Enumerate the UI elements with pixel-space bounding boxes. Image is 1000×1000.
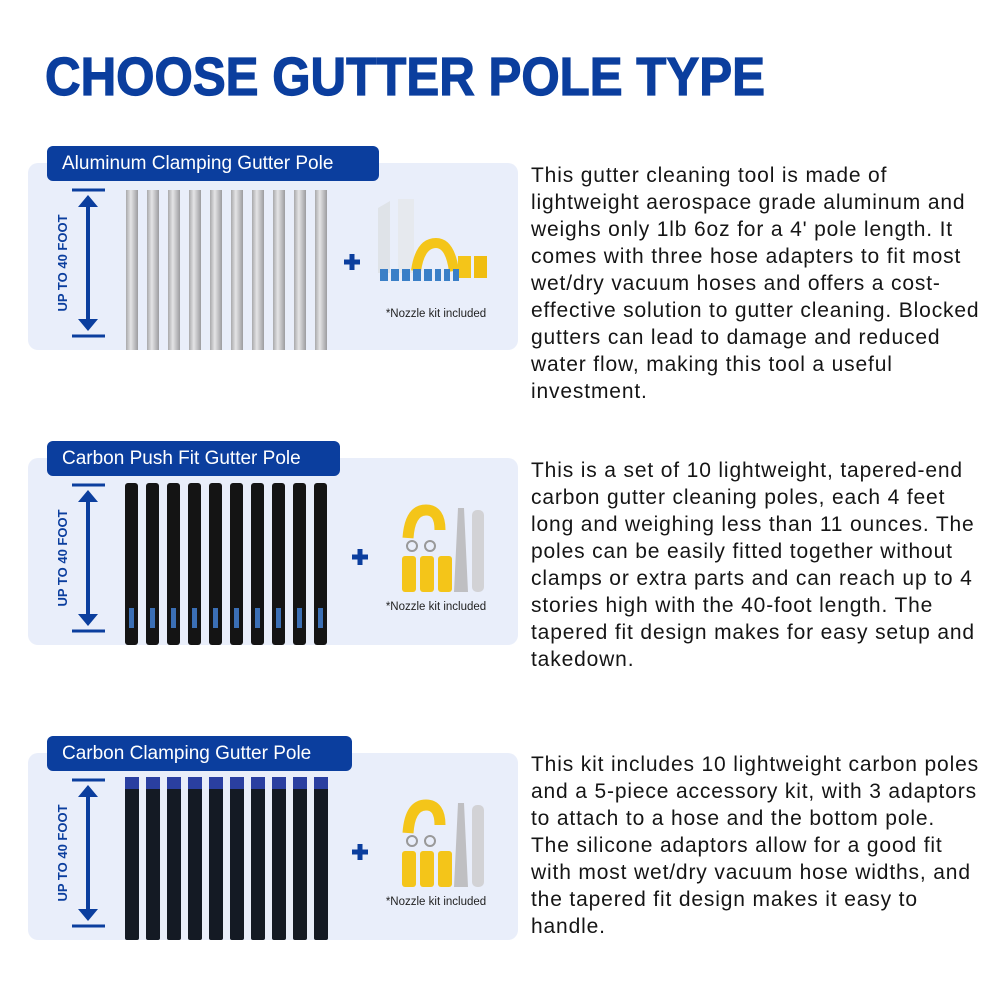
text: carbon clamping: to attach to a hose and the bottom pole. [531, 807, 935, 830]
plus [352, 549, 368, 565]
text: aluminum: lightweight aerospace grade aluminum and [531, 191, 965, 214]
text: aluminum: wet/dry vacuum hoses and offers a cost- [531, 272, 941, 295]
caption: *Nozzle kit included [386, 601, 486, 613]
text: carbon clamping [531, 753, 979, 938]
text: aluminum: investment. [531, 380, 648, 403]
icon: nozzle kit [378, 199, 487, 281]
text: carbon push fit: long and weighing less than 11 ounces. The [531, 513, 975, 536]
text: aluminum: This gutter cleaning tool is made of [531, 164, 887, 187]
arrow: height [72, 190, 105, 336]
label: carbon clamping [47, 736, 352, 771]
text: aluminum [531, 164, 979, 403]
text: carbon clamping: This kit includes 10 lightweight carbon poles [531, 753, 979, 776]
panel: aluminum [28, 163, 518, 350]
label vertical: UP TO 40 FOOT [55, 509, 70, 607]
title: CHOOSE GUTTER POLE TYPE [45, 47, 765, 107]
panel: carbon push fit [28, 458, 518, 645]
plus [352, 844, 368, 860]
label: carbon push fit [47, 441, 340, 476]
label: carbon clamping: Carbon Clamping Gutter Pole [62, 743, 311, 764]
poles carbon clamping [125, 777, 328, 940]
caption: *Nozzle kit included [386, 308, 486, 320]
text: carbon push fit: This is a set of 10 lightweight, tapered-end [531, 459, 963, 482]
text: aluminum: comes with three hose adapters to fit most [531, 245, 961, 268]
text: carbon clamping: and a 5-piece accessory kit, with 3 adaptors [531, 780, 977, 803]
icon: nozzle kit [402, 508, 484, 592]
label: aluminum: Aluminum Clamping Gutter Pole [62, 153, 333, 174]
text: carbon push fit: clamps or extra parts and can reach up to 4 [531, 567, 973, 590]
arrow: height [72, 485, 105, 631]
text: aluminum: effective solution to gutter cleaning. Blocked [531, 299, 979, 322]
icon: nozzle kit [402, 803, 484, 887]
text: aluminum: weighs only 1lb 6oz for a 4' pole length. It [531, 218, 953, 241]
text: carbon push fit [531, 459, 975, 671]
text: carbon clamping: with most wet/dry vacuum hose widths, and [531, 861, 971, 884]
arrow: height [72, 780, 105, 926]
plus [344, 254, 360, 270]
label: carbon push fit: Carbon Push Fit Gutter Pole [62, 448, 301, 469]
text: carbon push fit: takedown. [531, 648, 634, 671]
text: carbon push fit: poles can be easily fitted together without [531, 540, 953, 563]
text: carbon clamping: The silicone adaptors allow for a good fit [531, 834, 943, 857]
text: carbon push fit: tapered fit design makes for easy setup and [531, 621, 975, 644]
text: carbon push fit: carbon gutter cleaning poles, each 4 feet [531, 486, 945, 509]
label: aluminum [47, 146, 379, 181]
label vertical: UP TO 40 FOOT [55, 804, 70, 902]
text: carbon clamping: the tapered fit design makes it easy to [531, 888, 918, 911]
caption: *Nozzle kit included [386, 896, 486, 908]
text: aluminum: gutters can lead to damage and reduced [531, 326, 940, 349]
poles aluminum [126, 190, 327, 350]
panel: carbon clamping [28, 753, 518, 940]
text: carbon push fit: stories high with the 40-foot length. The [531, 594, 933, 617]
text: aluminum: water flow, making this tool a useful [531, 353, 893, 376]
label vertical: UP TO 40 FOOT [55, 214, 70, 312]
poles carbon [125, 483, 327, 645]
text: carbon clamping: handle. [531, 915, 606, 938]
